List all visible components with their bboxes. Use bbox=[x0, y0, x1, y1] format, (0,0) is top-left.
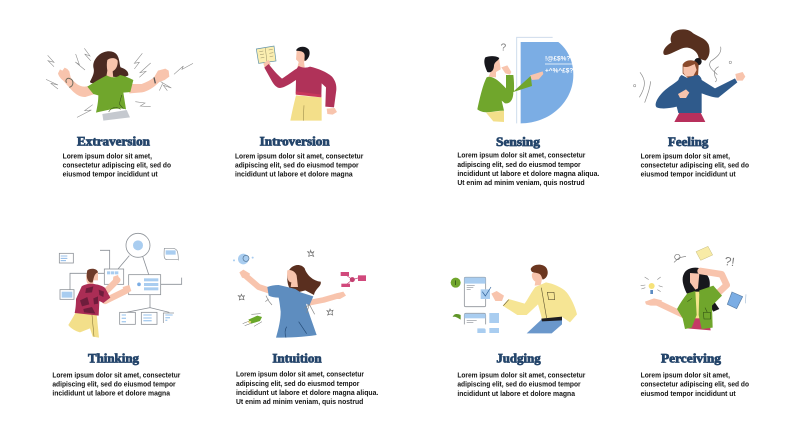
body text: incididunt ut labore et dolore magna bbox=[52, 390, 171, 398]
body text: adipiscing elit, sed do eiusmod tempor bbox=[235, 162, 359, 170]
body text: Lorem ipsum dolor sit amet, consectetur bbox=[235, 152, 364, 160]
body text: consectetur adipiscing elit, sed do bbox=[641, 381, 750, 389]
body text bbox=[236, 371, 378, 406]
heading: Extraversion: Extraversion bbox=[77, 135, 150, 149]
illustration: person pointing at a blue board: +^%^£$? bbox=[545, 66, 573, 74]
body text: eiusmod tempor incididunt ut bbox=[641, 171, 736, 179]
illustration: woman in blue dress with floating ideas bbox=[233, 250, 366, 338]
body text: Lorem ipsum dolor sit amet, consectetur bbox=[457, 372, 586, 380]
body text: eiusmod tempor incididunt ut bbox=[63, 171, 158, 179]
panel: feeling bbox=[633, 29, 750, 179]
body text: incididunt ut labore et dolore magna aliqua. bbox=[457, 170, 599, 178]
panel: introversion bbox=[235, 46, 364, 179]
body text bbox=[457, 152, 599, 187]
body text: consectetur adipiscing elit, sed do bbox=[641, 162, 750, 170]
panel: extraversion and introversion coordinates bbox=[46, 46, 364, 179]
illustration: woman with lightbulb and questions: ?! bbox=[724, 254, 736, 269]
body text: Lorem ipsum dolor sit amet, consectetur bbox=[457, 152, 586, 160]
heading: Judging: Judging bbox=[496, 351, 542, 365]
illustration: woman shouting with lightning marks bbox=[46, 48, 193, 121]
body text: Lorem ipsum dolor sit amet, bbox=[641, 372, 730, 380]
illustration: person pointing at a blue board bbox=[477, 37, 573, 123]
illustration: man reading a book bbox=[256, 46, 337, 121]
body text: incididunt ut labore et dolore magna bbox=[235, 171, 354, 179]
body text: incididunt ut labore et dolore magna aliqua. bbox=[236, 389, 378, 397]
heading: Thinking: Thinking bbox=[88, 351, 140, 365]
panel: sensing and feeling coordinates bbox=[457, 29, 750, 187]
illustration: man ticking a checklist bbox=[451, 265, 577, 333]
body text bbox=[641, 152, 750, 179]
body text: eiusmod tempor incididunt ut bbox=[641, 390, 736, 398]
body text: Lorem ipsum dolor sit amet, consectetur bbox=[52, 371, 181, 379]
body text: Lorem ipsum dolor sit amet, bbox=[63, 152, 152, 160]
illustration: person with flowchart diagram bbox=[59, 233, 182, 338]
panel: extraversion bbox=[46, 48, 193, 179]
panel: intuition bbox=[233, 250, 378, 406]
heading: Feeling: Feeling bbox=[668, 135, 709, 149]
body text bbox=[52, 371, 181, 398]
body text bbox=[63, 152, 172, 179]
panel: sensing bbox=[457, 37, 599, 187]
body text: Lorem ipsum dolor sit amet, bbox=[641, 152, 730, 160]
body text: Ut enim ad minim veniam, quis nostrud bbox=[236, 398, 363, 406]
body text bbox=[457, 372, 586, 398]
heading: Introversion: Introversion bbox=[260, 135, 330, 149]
panel: judging bbox=[451, 265, 586, 398]
panel: thinking bbox=[52, 233, 182, 398]
illustration: person pointing at a blue board: ? bbox=[501, 43, 507, 54]
body text bbox=[235, 152, 364, 179]
body text: consectetur adipiscing elit, sed do bbox=[63, 162, 172, 170]
illustration: woman with lightbulb and questions bbox=[641, 246, 746, 330]
body text: adipiscing elit, sed do eiusmod tempor bbox=[236, 380, 360, 388]
heading: Perceiving: Perceiving bbox=[661, 351, 722, 365]
body text: Lorem ipsum dolor sit amet, consectetur bbox=[236, 371, 364, 379]
panel: thinking and intuition coordinates bbox=[52, 233, 378, 406]
body text: adipiscing elit, sed do eiusmod tempor bbox=[52, 381, 176, 389]
panel: judging and perceiving coordinates bbox=[451, 246, 750, 398]
illustration: person pointing at a blue board: !@£$%? bbox=[545, 56, 570, 63]
panel: perceiving bbox=[641, 246, 750, 398]
body text: adipiscing elit, sed do eiusmod tempor bbox=[457, 161, 581, 169]
body text: Ut enim ad minim veniam, quis nostrud bbox=[457, 179, 585, 187]
illustration: woman with flowing hair, hand on chest bbox=[633, 29, 745, 122]
body text: adipiscing elit, sed do eiusmod tempor bbox=[457, 381, 581, 389]
body text bbox=[641, 372, 750, 398]
heading: Sensing: Sensing bbox=[496, 135, 541, 149]
body text: incididunt ut labore et dolore magna bbox=[457, 390, 576, 398]
heading: Intuition: Intuition bbox=[272, 351, 322, 365]
